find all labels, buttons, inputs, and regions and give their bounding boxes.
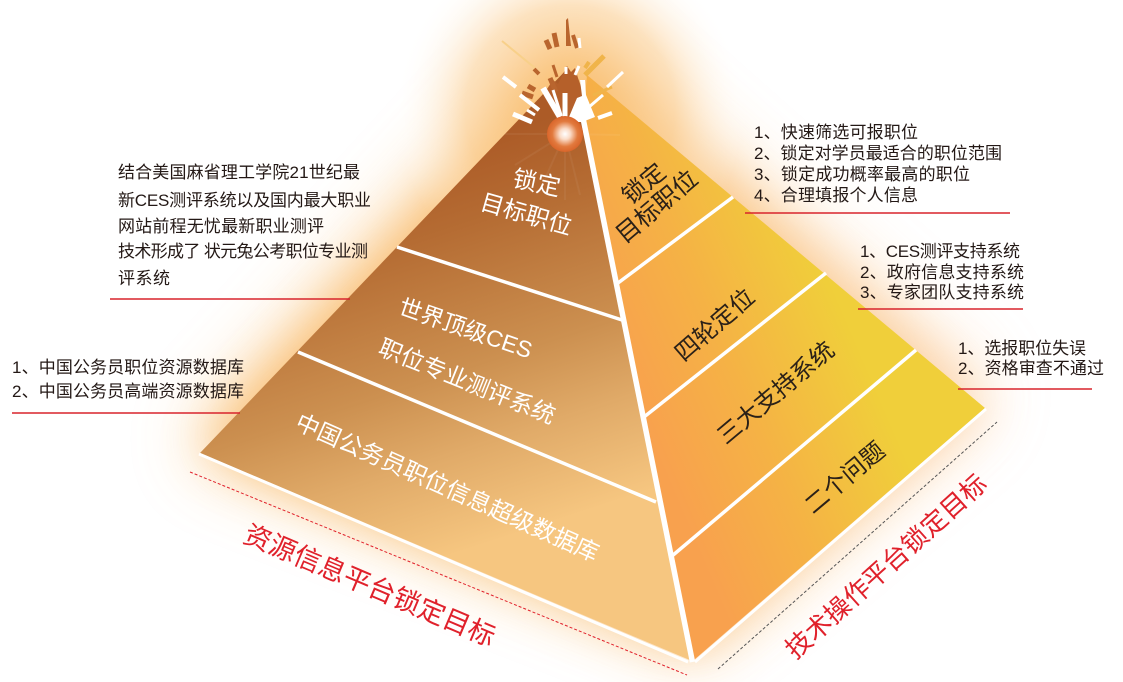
callout: platform description: 网站前程无忧最新职业测评 [118, 217, 324, 236]
callout: database list: 2、中国公务员高端资源数据库 [12, 382, 244, 401]
label: 目标职位 (right): 目标职位 [610, 165, 703, 249]
bottom edge highlight [199, 409, 986, 662]
left heading: 资源信息平台锁定目标: 资源信息平台锁定目标 [239, 519, 500, 652]
callout: support systems list: 3、专家团队支持系统 [860, 283, 1024, 302]
right face [583, 75, 985, 660]
icon: sun burst [502, 18, 623, 152]
callout: target position list: 1、快速筛选可报职位 [754, 123, 918, 142]
pyramid [199, 68, 986, 662]
left heading: 资源信息平台锁定目标 [190, 472, 687, 675]
callout: platform description: 结合美国麻省理工学院21世纪最 [118, 163, 360, 182]
callout: two problems list: 1、选报职位失误 [958, 339, 1086, 358]
callout: database list: 1、中国公务员职位资源数据库 [12, 358, 244, 377]
label: 职位专业测评系统: 职位专业测评系统 [375, 334, 559, 429]
centre divider [583, 118, 692, 662]
callout: two problems list: 2、资格审查不通过 [958, 359, 1104, 378]
left face [200, 68, 692, 661]
callout: platform description: 评系统 [118, 269, 170, 288]
right heading: 技术操作平台锁定目标: 技术操作平台锁定目标 [779, 468, 993, 664]
left face labels [292, 165, 603, 566]
label: 锁定 (left): 锁定 [510, 165, 563, 202]
label: 三大支持系统: 三大支持系统 [712, 337, 840, 450]
callout: support systems list [858, 242, 1024, 309]
sun core [547, 116, 583, 152]
callout: two problems list [958, 339, 1104, 389]
callout: target position list: 2、锁定对学员最适合的职位范围 [754, 144, 1002, 163]
label: 世界顶级CES: 世界顶级CES [396, 293, 536, 363]
callout: target position list: 3、锁定成功概率最高的职位 [754, 165, 970, 184]
right heading: 技术操作平台锁定目标 [718, 422, 997, 669]
callout: platform description: 技术形成了 状元兔公考职位专业测 [118, 242, 368, 261]
callout: support systems list: 1、CES测评支持系统 [860, 242, 1020, 261]
callout: database list [12, 358, 244, 413]
label: 中国公务员职位信息超级数据库: 中国公务员职位信息超级数据库 [292, 409, 603, 566]
right face labels [610, 158, 891, 519]
callout: target position list [745, 123, 1010, 213]
label: 锁定 (right): 锁定 [617, 158, 671, 210]
label: 四轮定位: 四轮定位 [670, 284, 760, 367]
background glow [195, 0, 990, 660]
callout: platform description [110, 163, 371, 299]
label: 二个问题: 二个问题 [800, 437, 891, 519]
right layer dividers [618, 197, 916, 556]
callout: platform description: 新CES测评系统以及国内最大职业 [118, 191, 371, 210]
callout: support systems list: 2、政府信息支持系统 [860, 263, 1024, 282]
callout: target position list: 4、合理填报个人信息 [754, 186, 918, 205]
faint sun rays [505, 134, 620, 200]
label: 目标职位 (left): 目标职位 [477, 189, 575, 240]
left layer dividers [298, 247, 656, 502]
